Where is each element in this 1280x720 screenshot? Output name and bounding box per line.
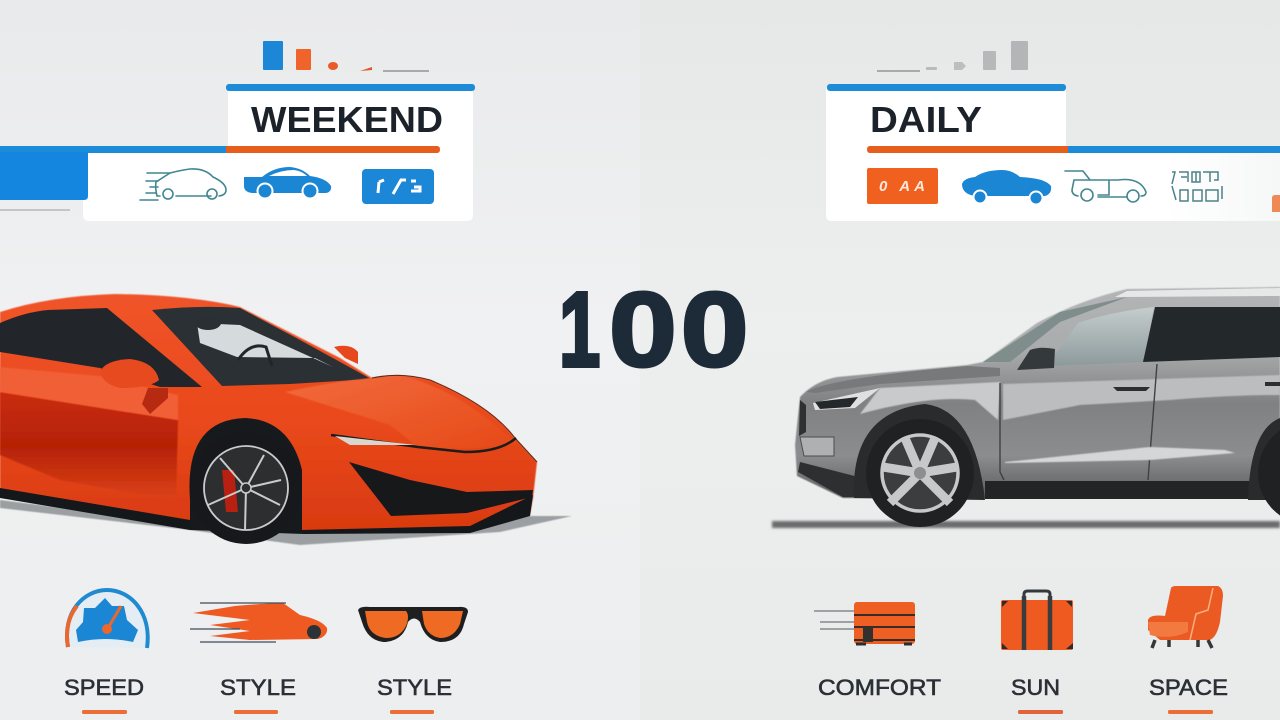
rear handle: [1265, 382, 1280, 386]
label: SPEED: [64, 675, 144, 700]
panel: weekend: [0, 41, 475, 221]
front wheel: [866, 419, 974, 527]
icon: suitcase with motion lines: [814, 602, 915, 644]
sill dark: [0, 488, 533, 534]
door panel: [0, 392, 178, 500]
icon: sunglasses: [358, 607, 468, 642]
roof rail: [1115, 288, 1280, 297]
feature: space: [1148, 586, 1228, 714]
background: right half: [640, 0, 1280, 720]
icon: speedometer: [67, 590, 148, 648]
feature: speed: [64, 590, 148, 714]
label: COMFORT: [818, 675, 941, 700]
label: SUN: [1011, 675, 1060, 700]
mirror arm: [142, 388, 168, 414]
rear window: [1143, 307, 1280, 362]
ground shadow: [772, 521, 1280, 528]
sill: [985, 481, 1280, 499]
underline: [1168, 710, 1213, 714]
icon: orange badge: [867, 168, 938, 204]
ground shadow: [0, 500, 572, 545]
big number: 1: [559, 271, 600, 389]
icon: solid blue car: [962, 170, 1051, 204]
icon: blue badge: [362, 169, 434, 204]
underline: [390, 710, 434, 714]
front window: [1047, 307, 1154, 366]
side windows: [0, 308, 202, 387]
car body: [795, 287, 1280, 498]
windscreen edge: [983, 297, 1127, 362]
underline: [82, 710, 127, 714]
grille: [799, 400, 806, 436]
car body: [0, 294, 537, 532]
wheel arch: [189, 418, 302, 530]
underline: [1018, 710, 1063, 714]
underline: [234, 710, 278, 714]
rear wheel: [1248, 418, 1280, 525]
front bumper: [798, 462, 870, 497]
feature: style sunglasses: [358, 607, 468, 714]
divider bar blue-orange: [0, 146, 440, 153]
icon: outline car: [1065, 171, 1146, 202]
seat: [238, 346, 272, 366]
heading: WEEKEND: [251, 99, 443, 140]
hood dark band: [806, 366, 1000, 393]
front intake: [349, 462, 533, 516]
background: left half: [0, 0, 640, 720]
door handle: [1113, 387, 1150, 391]
icon: armchair: [1148, 586, 1223, 648]
headlight line: [331, 435, 516, 452]
headlight: [335, 436, 416, 445]
icon: garbled line glyph: [1172, 172, 1222, 201]
top bar: [827, 84, 1066, 91]
feature: sun: [1001, 591, 1073, 714]
hood panel: [285, 375, 512, 448]
icon: orange badge: 0 AA: [879, 178, 925, 195]
label: SPACE: [1149, 675, 1228, 700]
rear view mirror: [195, 316, 221, 330]
blue block: [0, 152, 88, 200]
icon: solid blue car: [244, 167, 331, 198]
wheel arch: [854, 404, 985, 500]
icon: outline speeding car: [140, 169, 226, 200]
far side mirror: [334, 346, 358, 364]
illustration: orange sports car: [0, 294, 572, 545]
lower body highlight: [1005, 447, 1235, 463]
door highlight: [0, 367, 178, 420]
windscreen: [152, 307, 371, 386]
mirror: [1017, 348, 1055, 370]
icon: speeding orange car: [190, 603, 327, 642]
panel: daily: [826, 41, 1280, 221]
headlight: [813, 388, 880, 410]
door highlight: [1003, 375, 1280, 420]
icon: orange suitcase: [1001, 591, 1073, 650]
headlight lens: [815, 397, 858, 409]
fender highlight: [860, 382, 1000, 420]
panel background: [826, 88, 1280, 221]
heading: DAILY: [870, 99, 982, 140]
mini bar chart: [877, 41, 1028, 72]
mini bar chart: [263, 41, 429, 72]
fog lamp: [800, 437, 834, 456]
near side mirror: [100, 359, 159, 388]
feature: style car: [190, 603, 327, 714]
orange tab: [1272, 195, 1280, 212]
gray rule: [0, 209, 70, 211]
big number: 00: [609, 271, 749, 389]
door lines: [1000, 364, 1157, 480]
panel background: [83, 88, 473, 221]
hood outline: [372, 375, 537, 462]
wheel: [190, 432, 302, 544]
illustration: gray SUV: [772, 287, 1280, 528]
divider bar orange-blue: [867, 146, 1280, 153]
top bar: [226, 84, 475, 91]
feature: comfort: [814, 602, 941, 700]
label: STYLE: [220, 675, 296, 700]
windscreen light area: [197, 323, 333, 367]
label: STYLE: [377, 675, 452, 700]
